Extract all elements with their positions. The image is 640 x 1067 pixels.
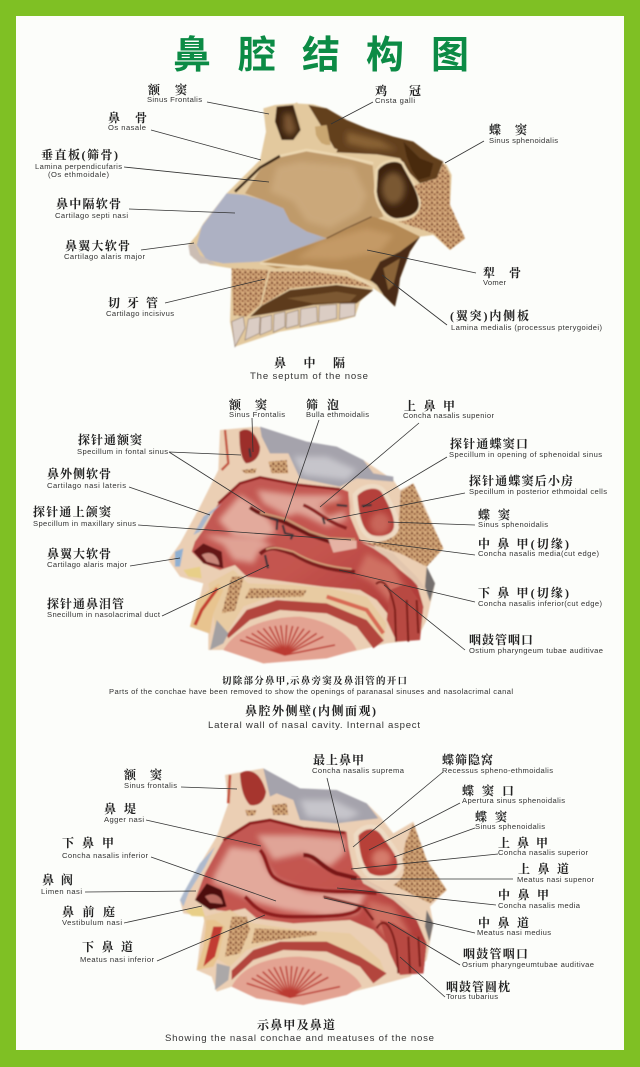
label: superior concha: Concha nasalis superior <box>498 848 588 857</box>
label: probe in frontal sinus: Specillum in fontal sinus <box>77 447 168 456</box>
label: probe in maxillary sinus: 探针通上颌窦 <box>33 504 111 519</box>
label: frontal sinus: Sinus frontalis <box>124 781 177 790</box>
label: ethmoid bulla: Bulla ethmoidalis <box>306 410 369 419</box>
label: lateral nasal cartilage: 鼻外侧软骨 <box>47 466 111 481</box>
label: pharyngeal opening of tube: 咽鼓管咽口 <box>469 632 533 647</box>
label: nasal vestibule: 鼻 前 庭 <box>62 904 115 919</box>
label: superior concha: Concha nasalis supenior <box>403 411 494 420</box>
label: pharyngeal opening of tube: Osrium pharyngeumtubae auditivae <box>462 960 594 969</box>
label: sphenoid sinus <box>388 507 548 529</box>
label: superior concha: 上 鼻 甲 <box>404 398 455 413</box>
label: middle meatus <box>324 898 551 937</box>
illustration: conchae and meatuses <box>180 768 447 1005</box>
label: perpendicular plate: (Os ethmoidale) <box>48 170 109 179</box>
panel: lateral wall of nasal cavity <box>33 397 607 731</box>
label: major alar cartilage <box>47 546 180 569</box>
label: crista galli: Cnsta galli <box>375 96 415 105</box>
label: perpendicular plate: Lamina perpendicufaris <box>35 162 122 171</box>
caption: lateral wall: 鼻腔外侧壁(内侧面观) <box>245 703 376 718</box>
label: probe in frontal sinus <box>77 432 265 513</box>
label: sphenoid sinus <box>445 122 558 163</box>
label: middle concha cut edge: 中 鼻 甲(切缘) <box>478 536 569 551</box>
caption: lateral wall: 切除部分鼻甲,示鼻旁窦及鼻泪管的开口 <box>222 675 407 687</box>
label: inferior concha <box>62 835 276 901</box>
label: major alar cartilage: Cartilago alaris major <box>64 252 145 261</box>
label: sphenoid sinus: Sinus sphenoidalis <box>489 136 558 145</box>
label: middle concha cut edge <box>359 536 599 558</box>
label: torus tubarius: Torus tubarius <box>446 992 498 1001</box>
label: middle concha: Concha nasalis media <box>498 901 581 910</box>
label: frontal sinus <box>147 82 269 114</box>
label: superior meatus: 上 鼻 道 <box>518 861 569 876</box>
label: probe in frontal sinus: 探针通额窦 <box>78 432 142 447</box>
label: septal cartilage <box>55 196 235 220</box>
label: vomer: 犁 骨 <box>483 265 521 280</box>
label: limen nasi: Limen nasi <box>41 887 82 896</box>
label: nasal vestibule: Vestibulum nasi <box>62 918 122 927</box>
panel: the septum of the nose <box>35 82 602 382</box>
label: frontal sinus: Sinus Frontalis <box>229 410 285 419</box>
label: superior concha <box>320 398 494 507</box>
label: major alar cartilage: 鼻翼大软骨 <box>47 546 111 561</box>
label: crista galli: 鸡 冠 <box>375 83 421 98</box>
label: nasal bone: 鼻 骨 <box>108 110 147 125</box>
label: nasal bone <box>108 110 261 160</box>
label: limen nasi <box>41 872 196 896</box>
label: medial plate <box>382 275 602 332</box>
caption: lateral wall <box>109 675 513 731</box>
label: probe in nasolacrimal duct <box>47 565 269 619</box>
title: 构 <box>366 35 404 77</box>
label: medial plate: (翼突)内侧板 <box>450 308 529 323</box>
label: inferior concha cut edge <box>339 570 602 608</box>
label: superior meatus: Meatus nasi supenor <box>517 875 594 884</box>
label: ethmoid bulla <box>284 397 369 522</box>
label: sphenoid sinus: 蝶 窦 <box>489 122 527 137</box>
label: medial plate: Lamina medialis (processus pterygoidei) <box>451 323 602 332</box>
label: middle meatus: Meatus nasi medius <box>477 928 551 937</box>
label: inferior meatus: Meatus nasi inferior <box>80 955 154 964</box>
label: inferior concha: 下 鼻 甲 <box>62 835 114 850</box>
label: lateral nasal cartilage <box>47 466 210 515</box>
label: nasal vestibule <box>62 904 202 927</box>
label: probe in maxillary sinus: Specillum in maxillary sinus <box>33 519 136 528</box>
label: inferior concha: Concha nasalis inferior <box>62 851 148 860</box>
caption: conchae and meatuses: Showing the nasal conchae and meatuses of the nose <box>165 1033 434 1044</box>
label: probe in nasolacrimal duct: Snecillum in nasolacrimal duct <box>47 610 161 619</box>
label: middle concha cut edge: Concha nasalis media(cut edge) <box>478 549 599 558</box>
label: middle meatus: 中 鼻 道 <box>478 915 529 930</box>
title: 鼻 <box>173 35 211 77</box>
label: septal cartilage: 鼻中隔软骨 <box>56 196 121 211</box>
label: perpendicular plate: 垂直板(筛骨) <box>41 147 118 162</box>
label: sphenoid sinus: 蝶 窦 <box>475 809 507 824</box>
label: pharyngeal opening of tube <box>388 922 594 969</box>
label: superior concha <box>351 835 588 869</box>
label: superior concha: 上 鼻 甲 <box>498 835 548 850</box>
label: agger nasi <box>104 801 261 846</box>
label: vomer <box>367 250 521 287</box>
label: sphenoid aperture <box>369 783 565 850</box>
label: sphenoid sinus: 蝶 窦 <box>478 507 510 522</box>
label: incisive canal <box>106 279 265 318</box>
label: middle concha: 中 鼻 甲 <box>498 887 549 902</box>
label: probe in sphenoid opening <box>363 436 602 507</box>
label: frontal sinus <box>123 767 237 790</box>
title: 腔 <box>238 35 276 77</box>
label: superior meatus <box>351 861 594 884</box>
label: probe in sphenoid opening: Specillum in opening of sphenoidal sinus <box>449 450 602 459</box>
label: probe in sphenoid opening: 探针通蝶窦口 <box>450 436 528 451</box>
label: inferior meatus: 下 鼻 道 <box>82 939 133 954</box>
label: perpendicular plate <box>35 147 269 182</box>
label: torus tubarius <box>400 957 510 1001</box>
caption: septum <box>250 355 368 382</box>
label: vomer: Vomer <box>483 278 506 287</box>
caption: septum: 鼻 中 隔 <box>274 355 345 370</box>
caption: conchae and meatuses: 示鼻甲及鼻道 <box>257 1017 335 1032</box>
caption: lateral wall: Parts of the conchae have been removed to show the openings of paranasal sinuses and nasolacrimal canal <box>109 687 513 696</box>
title: 结 <box>302 35 340 77</box>
label: supreme concha <box>312 752 405 852</box>
label: probe in nasolacrimal duct: 探针通鼻泪管 <box>47 596 124 611</box>
label: probe in posterior ethmoidal cells: 探针通蝶窦后小房 <box>469 473 573 488</box>
label: frontal sinus: 额 窦 <box>147 82 187 97</box>
label: nasal bone: Os nasale <box>108 123 146 132</box>
label: incisive canal: 切 牙 管 <box>108 295 158 310</box>
caption: conchae and meatuses <box>165 1017 434 1044</box>
label: pharyngeal opening of tube: 咽鼓管咽口 <box>463 946 528 961</box>
label: sphenoethmoidal recess: 蝶筛隐窝 <box>442 752 493 767</box>
label: pharyngeal opening of tube <box>384 585 603 655</box>
caption: septum: The septum of the nose <box>250 371 368 382</box>
label: ethmoid bulla: 筛 泡 <box>306 397 339 412</box>
label: sphenoid sinus: Sinus sphenoidalis <box>478 520 548 529</box>
label: sphenoid sinus <box>394 809 545 857</box>
label: sphenoid aperture: 蝶 窦 口 <box>462 783 514 798</box>
label: lateral nasal cartilage: Cartilago nasi lateris <box>47 481 126 490</box>
label: sphenoid aperture: Apertura sinus sphenoidalis <box>462 796 565 805</box>
label: major alar cartilage: Cartilago alaris major <box>47 560 127 569</box>
label: major alar cartilage: 鼻翼大软骨 <box>65 238 130 253</box>
label: probe in posterior ethmoidal cells: Specillum in posterior ethmoidal cells <box>469 487 607 496</box>
caption: lateral wall: Lateral wall of nasal cavity. Internal aspect <box>208 720 420 731</box>
label: septal cartilage: Cartilago septi nasi <box>55 211 128 220</box>
illustration: lateral wall with probes <box>168 427 443 663</box>
label: frontal sinus: 额 窦 <box>123 767 162 782</box>
label: frontal sinus <box>228 397 285 452</box>
label: probe in maxillary sinus <box>33 504 351 540</box>
label: limen nasi: 鼻 阀 <box>42 872 73 887</box>
label: crista galli <box>331 83 421 124</box>
label: sphenoethmoidal recess <box>353 752 553 847</box>
title: 图 <box>431 35 469 77</box>
label: torus tubarius: 咽鼓管圆枕 <box>446 979 510 994</box>
label: inferior meatus <box>80 915 265 964</box>
label: incisive canal: Cartilago incisivus <box>106 309 174 318</box>
label: agger nasi: Agger nasi <box>104 815 144 824</box>
label: inferior concha cut edge: 下 鼻 甲(切缘) <box>478 585 569 600</box>
label: middle concha <box>337 887 581 910</box>
label: frontal sinus: 额 窦 <box>228 397 267 412</box>
title <box>173 35 469 77</box>
label: supreme concha: Concha nasalis suprema <box>312 766 405 775</box>
label: frontal sinus: Sinus Frontalis <box>147 95 202 104</box>
label: inferior concha cut edge: Concha nasalis inferior(cut edge) <box>478 599 602 608</box>
label: sphenoethmoidal recess: Recessus spheno-ethmoidalis <box>442 766 553 775</box>
label: sphenoid sinus: Sinus sphenoidalis <box>475 822 545 831</box>
label: major alar cartilage <box>64 238 194 261</box>
panel: conchae and meatuses <box>41 752 594 1044</box>
label: probe in posterior ethmoidal cells <box>327 473 607 520</box>
illustration: nasal septum <box>188 103 465 347</box>
label: supreme concha: 最上鼻甲 <box>313 752 364 767</box>
label: agger nasi: 鼻 堤 <box>104 801 136 816</box>
label: pharyngeal opening of tube: Ostium pharyngeum tubae auditivae <box>469 646 603 655</box>
